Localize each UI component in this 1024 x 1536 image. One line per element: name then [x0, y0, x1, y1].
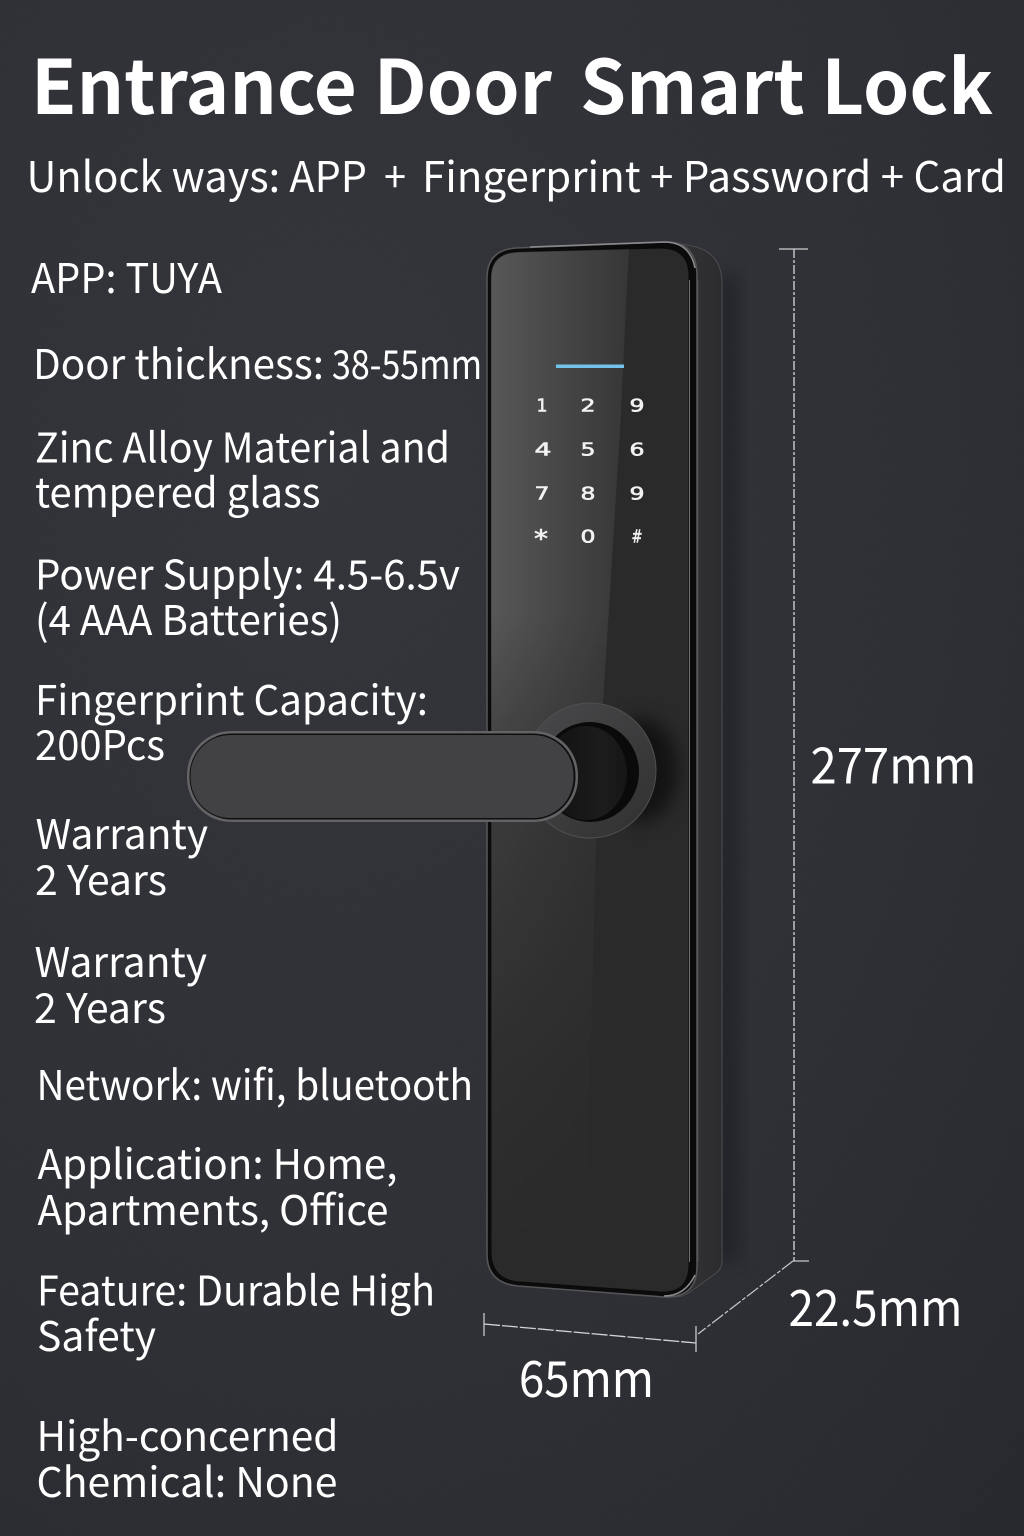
dimension: depth 22.5mm: 22.5mm — [788, 1269, 962, 1341]
spec: door thickness — [33, 331, 482, 391]
handle neck — [545, 726, 627, 820]
spec: feature: Safety — [37, 1303, 156, 1363]
keypad: 8 — [580, 484, 596, 504]
title — [31, 27, 993, 136]
keypad: 1 — [536, 396, 548, 416]
spec: power supply: Power Supply: 4.5-6.5v — [35, 542, 460, 602]
title: Smart Lock — [580, 27, 993, 136]
glass panel — [488, 245, 698, 1292]
spec: chemical — [36, 1403, 338, 1509]
keypad: 7 — [534, 484, 550, 504]
keypad — [534, 396, 644, 553]
subtitle: unlock ways: Unlock ways: APP — [26, 144, 367, 205]
keypad: 4 — [534, 440, 552, 460]
keypad: 2 — [580, 396, 596, 416]
spec: warranty: Warranty — [36, 801, 208, 861]
spec: fingerprint capacity: 200Pcs — [35, 712, 165, 772]
keypad: # — [632, 526, 642, 548]
spec: application: Apartments, Office — [38, 1177, 388, 1237]
spec: material — [35, 414, 450, 520]
lock shadow — [716, 275, 738, 1260]
keypad: 9 — [630, 484, 644, 504]
handle rose — [524, 703, 656, 838]
smart lock product — [187, 242, 738, 1297]
specification list — [31, 245, 482, 1509]
spec: warranty: 2 Years — [35, 847, 167, 907]
keypad: * — [534, 525, 548, 553]
spec: warranty — [35, 801, 208, 907]
spec: door thickness: Door thickness: — [33, 331, 324, 391]
spec: power supply: (4 AAA Batteries) — [35, 587, 342, 647]
spec: power supply — [35, 542, 460, 647]
spec: feature: Feature: Durable High — [37, 1258, 435, 1318]
spec: warranty repeated — [34, 929, 207, 1035]
keypad: 5 — [580, 440, 596, 460]
lock front bezel — [487, 242, 697, 1297]
spec: application: Application: Home, — [38, 1131, 398, 1191]
spec: application — [38, 1131, 398, 1237]
dimension: width 65mm: 65mm — [519, 1340, 654, 1412]
indicator light — [556, 364, 624, 368]
keypad: 0 — [580, 526, 596, 548]
spec: warranty repeated: Warranty — [34, 929, 207, 989]
lock side body — [668, 242, 722, 1297]
spec: chemical: High-concerned — [36, 1403, 338, 1463]
subtitle: unlock ways: + — [384, 144, 406, 205]
spec: fingerprint capacity: Fingerprint Capacity: — [35, 667, 428, 727]
dimension: width 65mm — [484, 1313, 696, 1412]
spec: door thickness: 38-55mm — [332, 333, 482, 391]
spec: network: Network: wifi, bluetooth — [36, 1052, 473, 1112]
spec: chemical: Chemical: None — [36, 1449, 337, 1509]
subtitle: unlock ways: Fingerprint + Password + Card — [422, 144, 1006, 205]
dimension: depth 22.5mm — [698, 1261, 962, 1341]
spec: material: Zinc Alloy Material and — [35, 414, 450, 474]
spec: material: tempered glass — [35, 460, 320, 520]
subtitle: unlock ways — [26, 144, 1006, 205]
spec: feature — [37, 1258, 435, 1363]
title: Entrance Door — [31, 27, 552, 136]
bezel highlight — [530, 242, 695, 1296]
spec: warranty repeated: 2 Years — [34, 975, 166, 1035]
plate shadow behind rose — [632, 716, 681, 824]
keypad: 6 — [630, 440, 644, 460]
spec: fingerprint capacity — [35, 667, 428, 772]
dimension: height 277mm: 277mm — [810, 726, 976, 798]
lever handle — [187, 731, 578, 822]
keypad: 9 — [630, 396, 644, 416]
spec: app: APP: TUYA — [31, 245, 222, 305]
